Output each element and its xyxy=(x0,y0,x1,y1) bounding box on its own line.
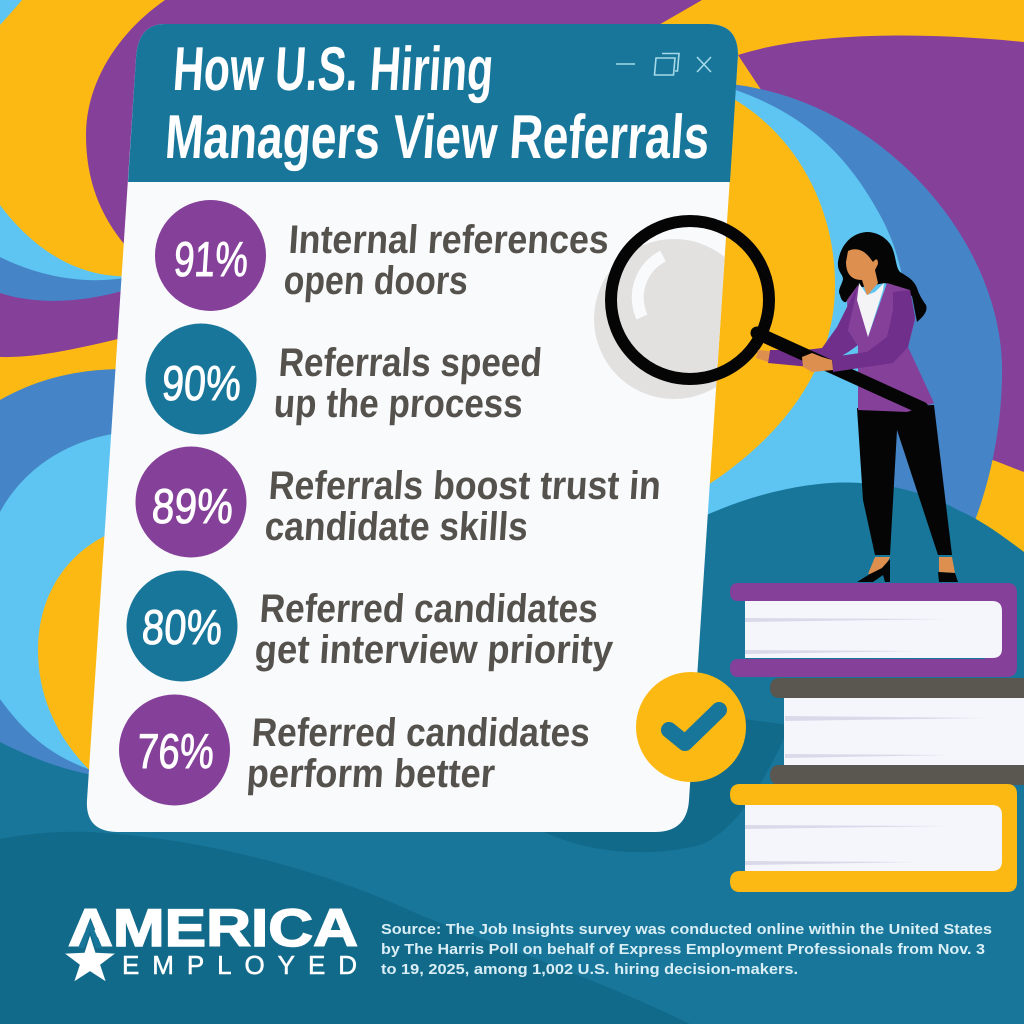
stat: 90 percent: up the process xyxy=(272,382,524,426)
stat: 90 percent xyxy=(146,324,543,434)
heading: How U.S. Hiring xyxy=(171,35,496,104)
logo: America Employed: AMERICA xyxy=(68,899,358,958)
stat: 89 percent: Referrals boost trust in xyxy=(267,464,662,508)
highlight xyxy=(638,256,663,317)
jacket xyxy=(847,283,934,412)
header bar xyxy=(128,24,738,182)
near hand xyxy=(802,353,833,372)
stat: 91 percent: Internal references xyxy=(287,218,610,262)
stat: 80 percent xyxy=(126,570,615,682)
far hand xyxy=(756,350,770,362)
heading: Managers View Referrals xyxy=(163,103,712,172)
icon: yellow check badge xyxy=(636,672,746,782)
star xyxy=(63,933,117,983)
heading xyxy=(163,35,712,172)
stat: 76 percent xyxy=(119,694,591,806)
magnifier ring xyxy=(611,221,769,379)
lens shadow on card xyxy=(594,239,725,399)
source note: by The Harris Poll on behalf of Express Employment Professionals from Nov. 3 xyxy=(381,942,985,958)
stat: 90 percent: 90% xyxy=(160,357,243,411)
source note: to 19, 2025, among 1,002 U.S. hiring decision-makers. xyxy=(381,962,798,978)
near sleeve xyxy=(832,290,915,372)
window controls xyxy=(616,54,711,75)
stat: 91 percent: 91% xyxy=(172,233,250,287)
neck and face xyxy=(846,249,878,296)
hair xyxy=(838,232,927,322)
purple book xyxy=(730,583,1017,677)
panel: browser window card xyxy=(87,24,738,832)
stat: 76 percent: 76% xyxy=(135,725,216,779)
far sleeve xyxy=(768,285,858,367)
gray book xyxy=(770,678,1024,785)
notch in first letter xyxy=(78,920,102,948)
illustration: stacked books xyxy=(730,583,1024,892)
magnifier handle xyxy=(757,333,922,408)
stat: 80 percent: Referred candidates xyxy=(258,587,599,631)
stat: 89 percent: candidate skills xyxy=(263,505,529,549)
logo: America Employed: EMPLOYED xyxy=(122,950,357,980)
source note: Source: The Job Insights survey was conducted online within the United States xyxy=(381,922,992,938)
gap between arm and torso xyxy=(847,345,858,355)
stat: 89 percent: 89% xyxy=(150,480,235,534)
stat: 76 percent: perform better xyxy=(245,752,496,796)
stat: 76 percent: Referred candidates xyxy=(250,711,591,755)
illustration: woman with magnifying glass xyxy=(594,221,958,582)
blouse xyxy=(857,283,884,337)
shoes xyxy=(868,557,890,574)
yellow book xyxy=(730,784,1017,892)
logo: America Employed xyxy=(63,899,358,983)
stat: 91 percent xyxy=(155,200,610,311)
stat: 91 percent: open doors xyxy=(282,259,469,303)
stat: 90 percent: Referrals speed xyxy=(277,341,543,385)
legs xyxy=(857,405,952,555)
stat: 80 percent: get interview priority xyxy=(253,628,615,672)
stat: 89 percent xyxy=(136,446,662,558)
source note xyxy=(381,922,992,978)
stat: 80 percent: 80% xyxy=(140,601,224,655)
